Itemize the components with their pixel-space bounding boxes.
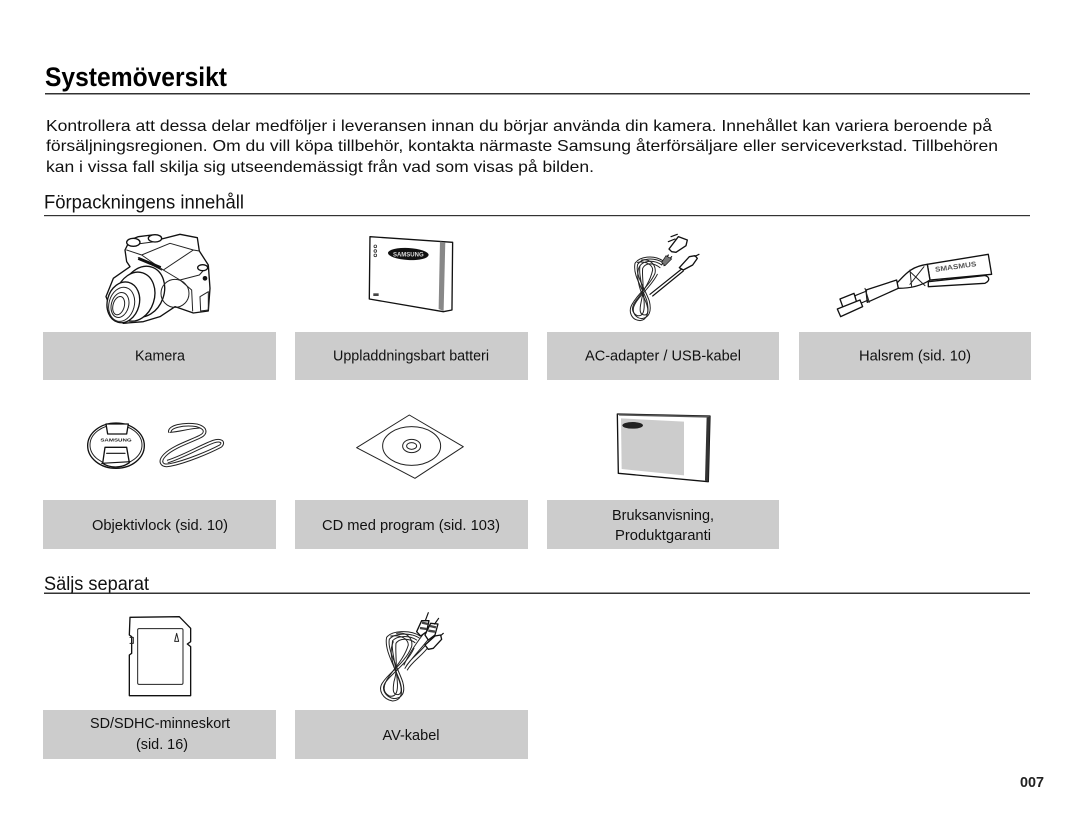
panel: Uppladdningsbart batteri [295, 332, 528, 380]
panel: AV-kabel: AV-kabel [382, 727, 440, 744]
heading: package contents: Förpackningens innehåll [44, 192, 244, 214]
icon: lens cap and cord: SAMSUNG [100, 438, 132, 443]
panel: Objektivlock [43, 500, 276, 549]
panel: AC-adapter / USB-kabel [547, 332, 779, 380]
intro text block: kan i vissa fall skilja sig utseendemässigt från vad som visas på bilden. [46, 158, 594, 176]
panel: Bruksanvisning, Produktgaranti [547, 500, 779, 549]
intro text block: Kontrollera att dessa delar medföljer i leveransen innan du börjar använda din kamera. Innehållet kan variera beroende på [46, 117, 992, 135]
panel: Halsrem: Halsrem (sid. 10) [859, 348, 971, 364]
intro text block: försäljningsregionen. Om du vill köpa tillbehör, kontakta närmaste Samsung återförsäljare eller serviceverkstad. Tillbehören [46, 137, 998, 155]
panel: AC-adapter / USB-kabel: AC-adapter / USB-kabel [585, 348, 741, 364]
icon: neck strap: SMASMUS [935, 261, 977, 274]
panel: Objektivlock: Objektivlock (sid. 10) [92, 517, 228, 534]
panel: SD/SDHC-minneskort: (sid. 16) [136, 736, 188, 753]
panel: Bruksanvisning, Produktgaranti: Bruksanvisning, [612, 507, 714, 524]
icon: AV cable [381, 613, 443, 701]
panel: Kamera: Kamera [135, 348, 186, 364]
panel: CD med program [295, 500, 528, 549]
icon: lens cap and cord [88, 423, 222, 468]
panel: AV-kabel [295, 710, 528, 759]
panel: SD/SDHC-minneskort: SD/SDHC-minneskort [90, 715, 231, 732]
icon: AC adapter and USB cable [630, 234, 699, 321]
panel: Bruksanvisning, Produktgaranti: Produktgaranti [615, 527, 711, 544]
icon: SD card [129, 617, 191, 696]
icon: battery [369, 237, 453, 312]
panel: CD med program: CD med program (sid. 103) [322, 517, 500, 534]
icon: camera [103, 234, 210, 326]
panel: Kamera [43, 332, 276, 380]
title: Systemöversikt [45, 62, 227, 92]
icon: manual booklet [617, 414, 710, 482]
panel: Uppladdningsbart batteri: Uppladdningsbart batteri [333, 348, 489, 364]
icon: neck strap [837, 254, 992, 317]
panel: SD/SDHC-minneskort [43, 710, 276, 759]
heading: sold separately: Säljs separat [44, 573, 150, 595]
panel: Halsrem [799, 332, 1031, 380]
page number: 007 [1020, 775, 1044, 791]
intro text block [46, 117, 998, 176]
icon: CD [357, 415, 463, 478]
icon: battery: SAMSUNG [393, 251, 424, 258]
